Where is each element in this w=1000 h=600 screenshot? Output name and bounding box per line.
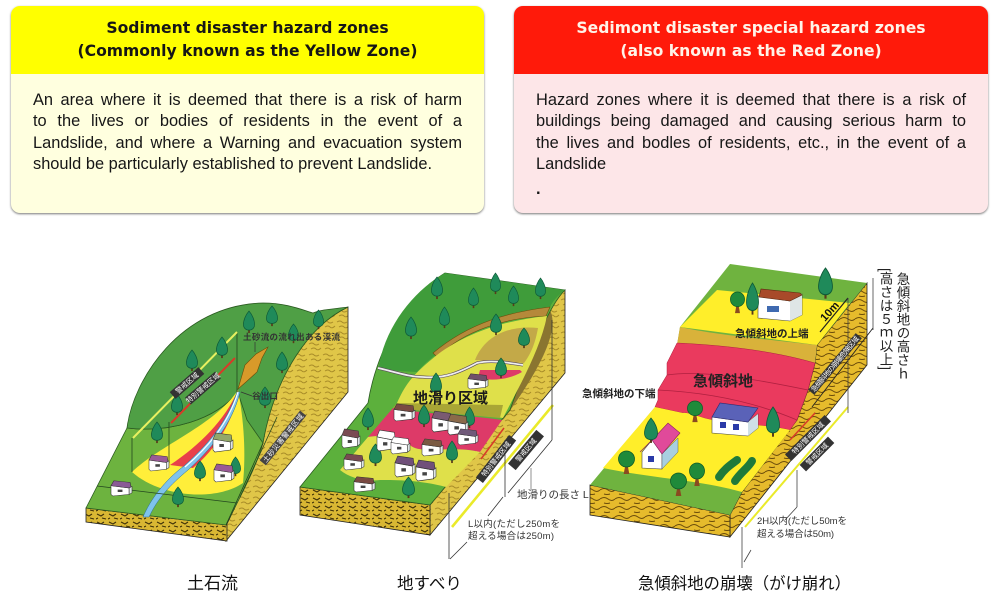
front soil face	[300, 487, 430, 535]
diagram: landslide: L以内(ただし250mを	[468, 518, 560, 530]
black zone labels: 特別警戒区域	[480, 440, 512, 478]
diagram: steep slope failure: [高さは５ｍ以上]	[878, 268, 893, 370]
houses	[111, 433, 234, 496]
front soil face	[590, 485, 730, 537]
lower yellow zone	[603, 407, 790, 492]
wall crack line	[812, 328, 873, 407]
upper yellow zone	[680, 290, 850, 345]
trees	[362, 273, 546, 498]
text block: red zone definition: .	[536, 180, 541, 198]
gully	[238, 347, 268, 389]
trees	[618, 268, 832, 496]
caption: landslide: 地すべり	[397, 574, 462, 593]
text block: yellow zone definition: to the lives or bodies of residents in the event of a	[33, 112, 462, 130]
text block: yellow zone definition: An area where it is deemed that there is a risk of harm	[33, 91, 462, 109]
red slope	[655, 343, 815, 430]
yellow zone	[340, 436, 480, 487]
dimension labels: 2H以内(ただし50mを	[757, 515, 847, 527]
caption: debris flow: 土石流	[187, 574, 238, 593]
black zone labels: 急傾斜地の崩壊危険区域	[809, 334, 861, 394]
10m label: 10m	[818, 299, 842, 324]
dimension lines	[742, 278, 873, 568]
diagram: steep slope failure: 急傾斜地の下端	[582, 387, 656, 400]
text block: red zone definition: buildings being damaged and causing serious harm to	[536, 112, 966, 130]
middle house	[712, 403, 758, 436]
note labels: 土砂流の流れ出ある渓流	[243, 332, 340, 342]
black zone labels	[785, 333, 862, 471]
landslide mass	[397, 316, 547, 418]
arrow: red extent	[790, 413, 815, 440]
slope labels: 急傾斜地の上端	[735, 327, 809, 340]
diagram: steep slope failure: 急傾斜地	[693, 372, 753, 390]
houses	[342, 374, 488, 492]
terrace brown edge	[677, 327, 817, 363]
hedges	[719, 460, 752, 481]
text block: red zone definition	[536, 91, 966, 198]
heading: red zone: (also known as the Red Zone)	[620, 42, 882, 60]
arrow: yellow extent	[452, 405, 553, 527]
black zone labels: 特別警戒区域	[184, 371, 222, 405]
upper house	[758, 289, 802, 321]
side wall soil	[226, 307, 348, 541]
panel: red zone	[514, 6, 988, 213]
zone name: 地滑り区域	[413, 390, 488, 407]
hazard fan: yellow zone	[132, 390, 244, 495]
heading: red zone: Sedimont disaster special hazard zones	[576, 19, 926, 37]
text block: red zone definition: Hazard zones where it is deemed that there is a risk of	[536, 91, 966, 109]
vertical height labels: 急傾斜地の高さｈ	[894, 272, 910, 380]
diagram: debris flow	[86, 303, 348, 541]
diagram: steep slope failure	[582, 264, 910, 568]
ground surface	[590, 264, 867, 515]
diagram: landslide	[300, 273, 589, 559]
hazard core: red zone	[170, 390, 238, 468]
olive block	[475, 327, 538, 363]
text block: red zone definition: Landslide	[536, 155, 606, 173]
black zone labels: 警戒区域	[804, 441, 830, 467]
scarp in side wall	[503, 310, 553, 420]
caption: steep slope failure: 急傾斜地の崩壊（がけ崩れ）	[638, 574, 851, 593]
black zone labels: 警戒区域	[173, 370, 201, 396]
scar edge	[433, 307, 550, 357]
dimension labels: 地滑りの長さ L	[517, 488, 589, 501]
text block: yellow zone definition: should be particularly established to prevent Landslide.	[33, 155, 432, 173]
upper hillside	[127, 303, 348, 443]
black zone labels: 特別警戒区域	[790, 420, 826, 456]
front soil face	[86, 508, 227, 541]
arrow: 10m	[820, 298, 848, 332]
arrow: yellow extent	[745, 407, 848, 527]
upper forest	[378, 273, 565, 372]
ground surface	[300, 273, 565, 505]
black zone labels	[170, 367, 307, 466]
lower house	[640, 423, 680, 469]
heading: red zone	[514, 6, 988, 74]
road	[378, 362, 523, 377]
side wall soil	[730, 283, 867, 537]
dimension lines	[449, 320, 552, 559]
black zone labels	[476, 430, 544, 483]
arrow: red extent	[481, 428, 504, 459]
diagram: debris flow: 谷出口	[252, 391, 278, 401]
diagram: steep slope failure: 超える場合は50m)	[757, 528, 834, 540]
heading: yellow zone: Sodiment disaster hazard zones	[106, 19, 389, 37]
contour and boundary lines	[97, 332, 277, 525]
trees	[151, 306, 324, 507]
red zone	[368, 408, 502, 452]
diagram: landslide: 超える場合は250m)	[468, 530, 554, 542]
heading: yellow zone: (Commonly known as the Yellow Zone)	[78, 42, 417, 60]
black zone labels: 土砂災害警戒区域	[261, 412, 305, 464]
arrow: red extent	[171, 358, 235, 423]
stream	[143, 392, 240, 517]
lower ground	[86, 392, 263, 525]
text block: red zone definition: the lives and bodles of residents, etc., in the event of a	[536, 134, 966, 152]
text block: yellow zone definition	[33, 91, 462, 173]
heading: yellow zone	[11, 6, 484, 74]
side wall soil	[430, 290, 565, 535]
text block: yellow zone definition: Landslide, and where a Warning and evacuation system	[33, 134, 462, 152]
black zone labels: 警戒区域	[514, 436, 538, 464]
panel: yellow zone	[11, 6, 484, 213]
arrow: yellow extent	[133, 332, 237, 438]
